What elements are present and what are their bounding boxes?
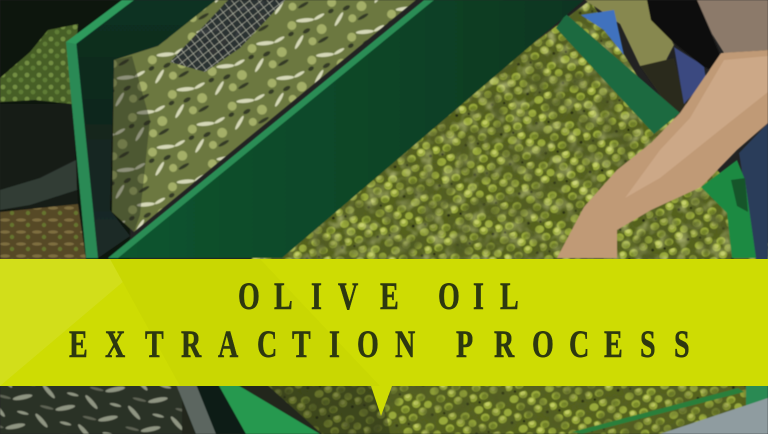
tilted bin: front panel [116,0,584,258]
tarp highlight [0,160,77,210]
right bin side wall [701,160,756,258]
green bin bottom [218,384,320,434]
right bin rim, far side [556,14,680,134]
blue crate [581,10,624,55]
leaves shadow lower left [112,56,150,232]
olive heap shadows [250,0,768,260]
tilted bin: inner wall [76,0,218,258]
leaves bottom left [0,380,182,434]
banner tint left [0,259,150,386]
green olive clump on the ground [0,24,78,104]
blue trousers upper [674,47,706,104]
olives bottom [262,380,768,434]
banner with speech tail [0,259,768,416]
olives bottom left darkening [262,380,390,434]
title line 2: EXTRACTION PROCESS [69,324,690,366]
tilted bin: top rim [66,0,134,44]
dark background top left [0,0,130,260]
brown ground [0,204,86,260]
olive heap bright mottling [250,0,768,260]
metal mesh [170,0,285,72]
banner tint centre [110,259,380,386]
banner shape [0,259,768,416]
title line 1: OLIVE OIL [238,276,519,318]
ground top right [585,0,674,68]
front panel rim [108,0,434,258]
olive heap in main bin [250,0,768,260]
jeans [739,123,768,260]
black bag [647,0,721,72]
lower strip base [0,380,768,434]
arm [557,50,768,258]
black tarp [0,104,78,210]
dark shrub top right [640,58,686,118]
olives bottom shadows [262,380,768,434]
dark notch on bin wall [731,178,748,212]
title [69,276,690,366]
metal rim [660,398,768,434]
leaves on the screen [112,0,416,232]
bottom right bin [746,384,768,410]
dark gap beside post [196,384,246,434]
tilted bin: left rim [66,40,98,258]
forearm highlight [625,56,768,198]
grey post [176,384,216,434]
shirt [697,0,768,53]
green stem [572,388,744,434]
